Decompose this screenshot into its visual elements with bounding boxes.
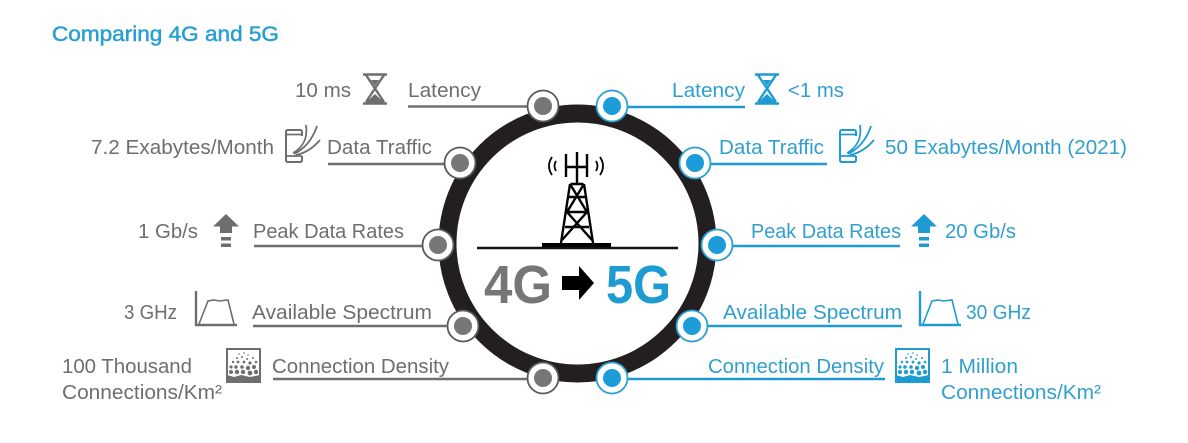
row: 5G connection density: Connection Density xyxy=(708,356,884,378)
row: 4G connection density: Connections/Km² xyxy=(62,382,222,404)
row: 5G latency: <1 ms xyxy=(788,80,844,102)
row: 5G available spectrum: 30 GHz xyxy=(966,302,1031,324)
row: 4G peak data rates xyxy=(138,214,424,247)
row: 4G connection density xyxy=(62,349,530,404)
row: 5G data traffic xyxy=(708,125,1127,164)
row: 5G connection density: Connections/Km² xyxy=(941,382,1101,404)
row: 4G latency xyxy=(295,74,530,106)
arrow xyxy=(562,266,594,300)
ground line xyxy=(477,247,678,249)
row: 4G latency: Latency xyxy=(408,80,481,102)
row: 4G peak data rates: Peak Data Rates xyxy=(253,221,404,243)
panel: central ring xyxy=(448,114,708,374)
5G label: 5G xyxy=(606,255,671,315)
title: Comparing 4G and 5G xyxy=(52,23,279,46)
4G nodes xyxy=(422,90,558,394)
row: 5G available spectrum: Available Spectrum xyxy=(723,302,902,324)
row: 4G data traffic: 7.2 Exabytes/Month xyxy=(91,137,274,159)
icon: cell tower xyxy=(542,152,611,247)
4G label: 4G xyxy=(484,255,552,315)
row: 4G data traffic: Data Traffic xyxy=(327,137,432,159)
row: 5G latency xyxy=(625,74,844,107)
row: 5G data traffic: 50 Exabytes/Month (2021) xyxy=(885,137,1127,159)
row: 4G connection density: Connection Density xyxy=(272,356,449,378)
panel: 5G metrics xyxy=(596,74,1127,404)
5G nodes xyxy=(596,90,732,394)
row: 5G data traffic: Data Traffic xyxy=(719,137,824,159)
panel: 4G metrics xyxy=(62,74,558,404)
row: 4G available spectrum: 3 GHz xyxy=(124,302,177,324)
row: 5G connection density xyxy=(625,349,1101,404)
row: 5G available spectrum xyxy=(705,291,1031,326)
row: 5G peak data rates: Peak Data Rates xyxy=(751,221,901,243)
row: 4G data traffic xyxy=(91,125,446,164)
row: 5G latency: Latency xyxy=(672,80,745,102)
row: 4G available spectrum xyxy=(124,291,450,326)
row: 5G connection density: 1 Million xyxy=(941,356,1018,378)
row: 4G latency: 10 ms xyxy=(295,80,351,102)
row: 4G peak data rates: 1 Gb/s xyxy=(138,221,198,243)
row: 4G available spectrum: Available Spectrum xyxy=(252,302,432,324)
row: 5G peak data rates xyxy=(730,214,1016,247)
row: 5G peak data rates: 20 Gb/s xyxy=(945,221,1016,243)
row: 4G connection density: 100 Thousand xyxy=(62,356,192,378)
